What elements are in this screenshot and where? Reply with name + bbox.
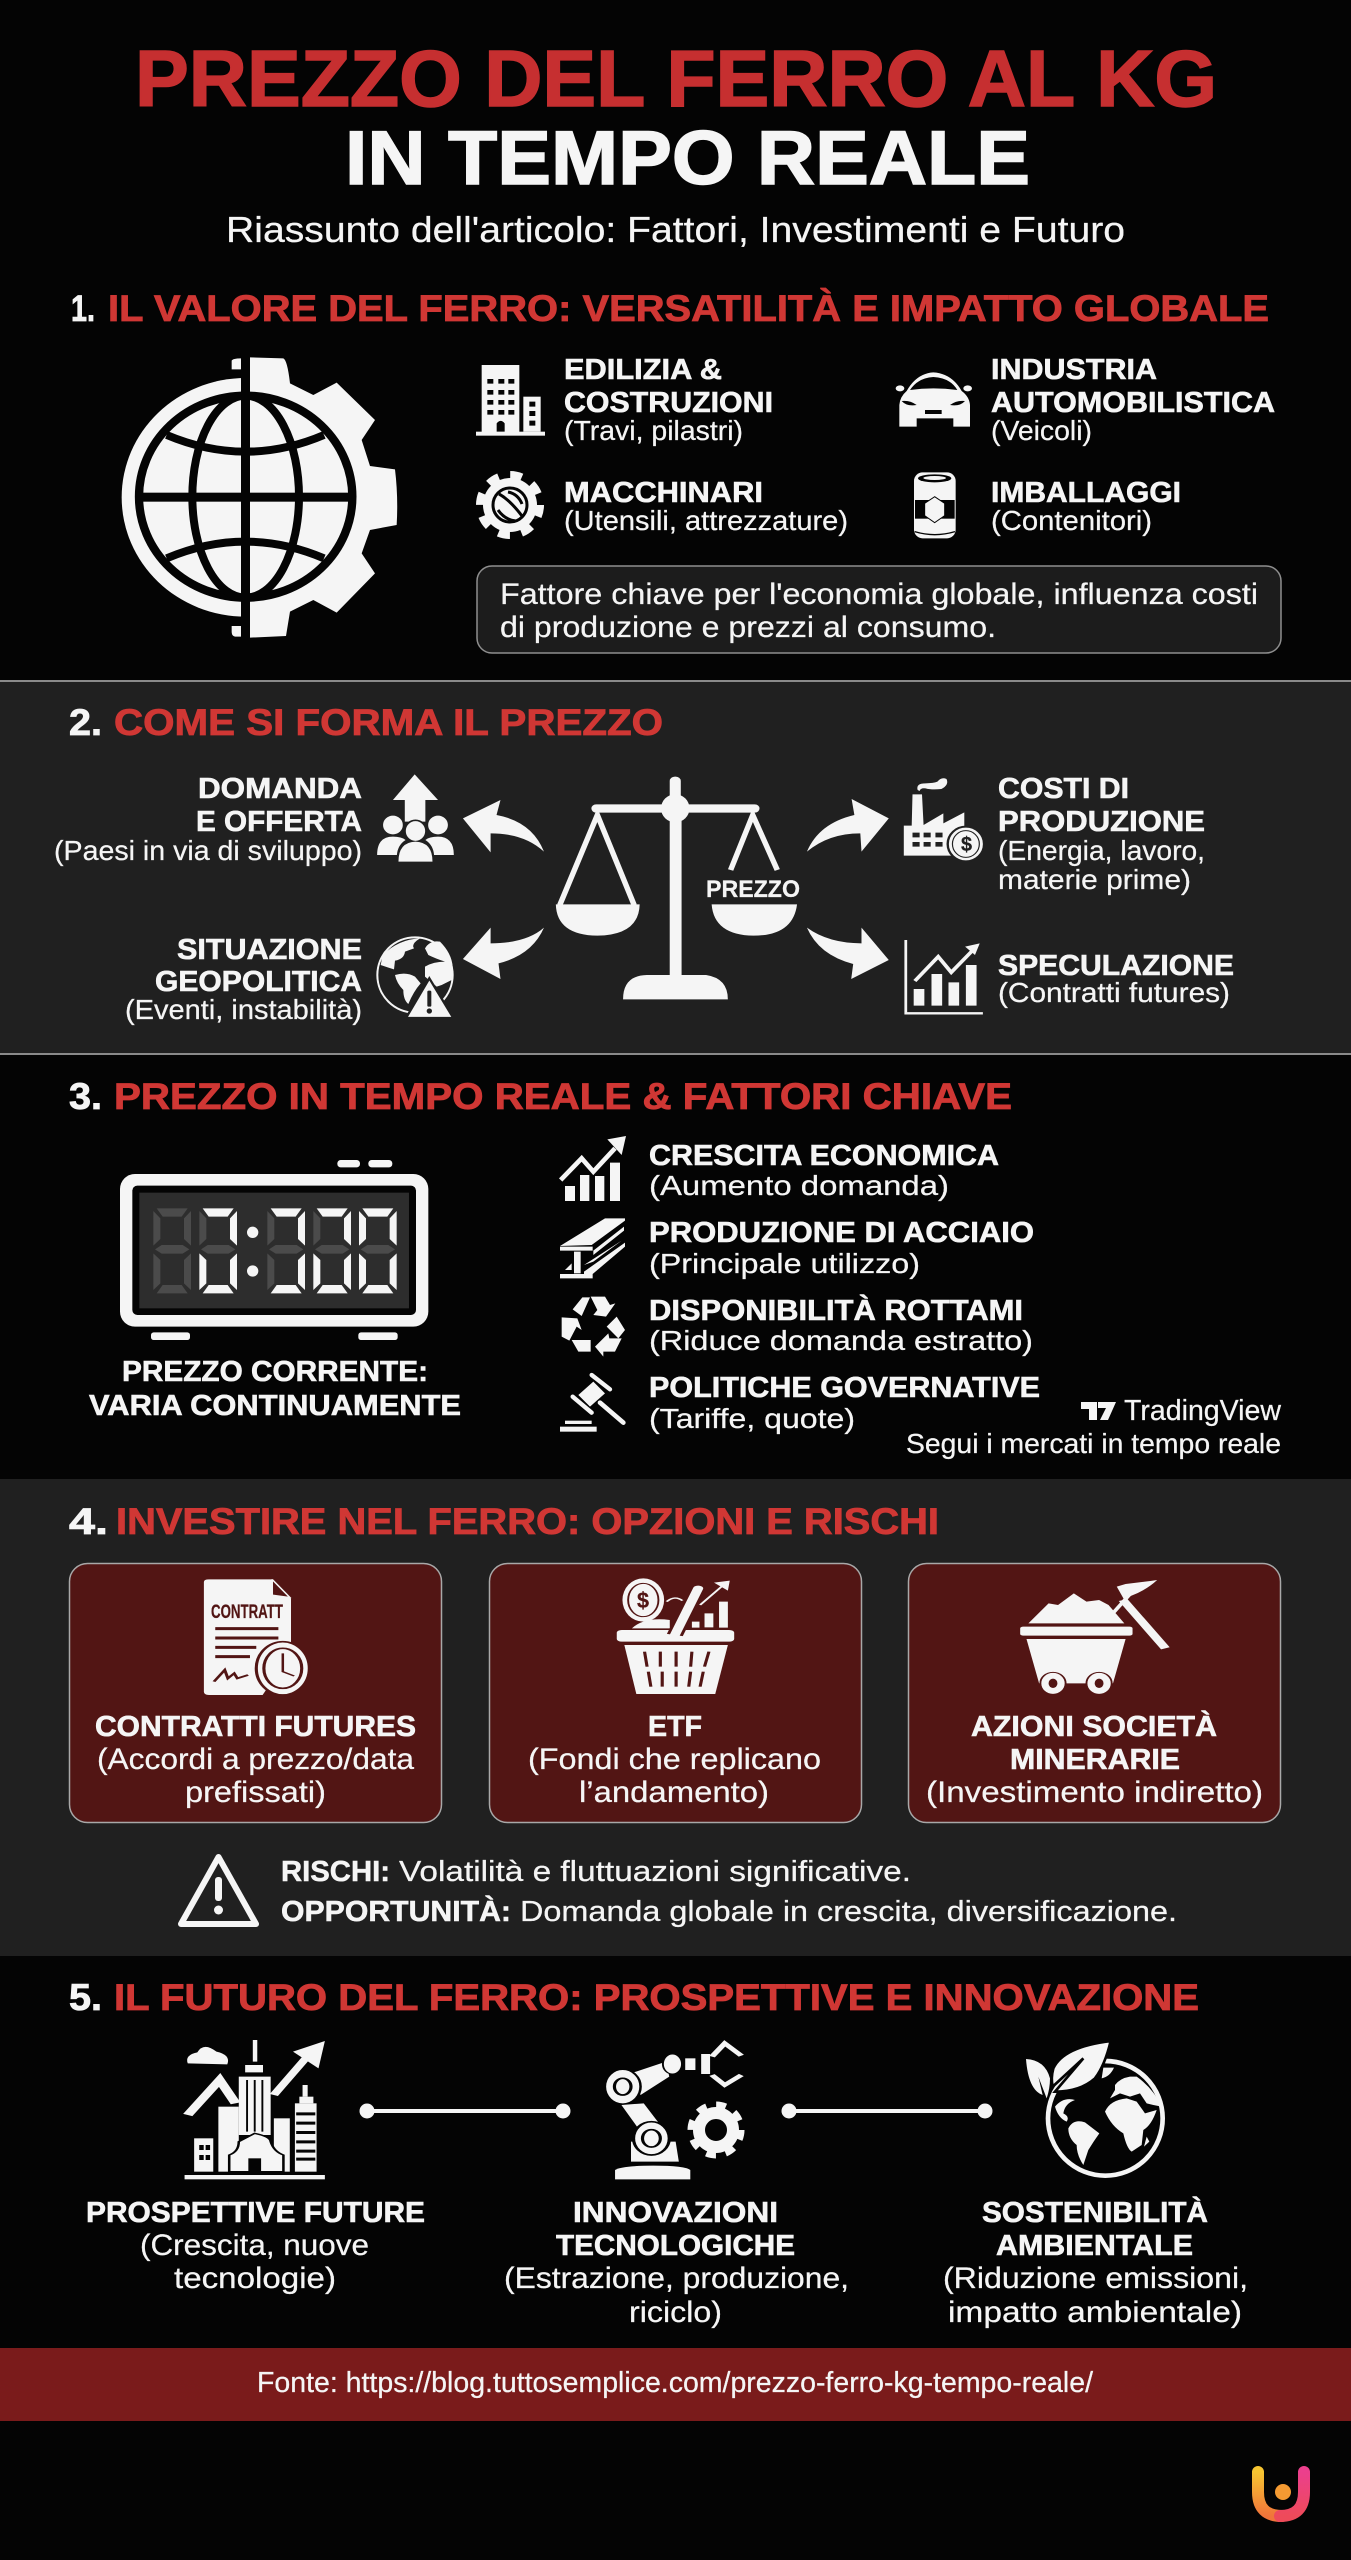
clock caption: VARIA CONTINUAMENTE [89,1390,461,1422]
heading 1: 1. [71,288,95,329]
factor: steel production [560,1217,1034,1279]
callout: key factor: Fattore chiave per l'economia globale, influenza costi [500,578,1258,611]
callout: key factor: di produzione e prezzi al consumo. [500,611,996,644]
icon: mine cart and pickaxe [1020,1580,1165,1694]
column: innovation: (Estrazione, produzione, [504,2262,849,2295]
icon: car [896,372,972,427]
card: etf [490,1564,862,1822]
item: automotive [896,354,1275,446]
item: automotive: AUTOMOBILISTICA [991,387,1275,419]
card: futures: CONTRATTI FUTURES [95,1711,416,1743]
column: future prospects: tecnologie) [174,2262,336,2295]
icon: globe and gear [122,340,414,660]
icon: gear [480,475,540,535]
item: edilizia [476,354,773,446]
item: speculation: (Contratti futures) [998,977,1230,1008]
icon: growth chart [561,1136,626,1201]
factor: economic growth: CRESCITA ECONOMICA [649,1140,999,1172]
item: demand and supply [54,773,454,866]
item: geopolitics: GEOPOLITICA [155,966,362,998]
clock caption [89,1356,461,1422]
scale label: PREZZO [706,876,800,903]
card: futures: prefissati) [185,1776,326,1809]
icon: factory and coin [904,778,984,861]
panel: section 1 value of iron [71,288,1281,660]
card: futures: (Accordi a prezzo/data [97,1743,415,1776]
arrow: to geopolitics [463,928,544,979]
title line 2: IN TEMPO REALE [345,116,1030,201]
arrow: to speculation [807,928,889,979]
icon: people and up arrow [377,774,454,862]
icon: steel beam [560,1218,625,1278]
panel: section 3 real time price [69,1076,1282,1459]
column: future prospects: (Crescita, nuove [140,2229,369,2262]
column: sustainability: (Riduzione emissioni, [943,2262,1248,2295]
icon: scale [556,777,797,999]
item: speculation [906,940,1234,1013]
item: production costs: PRODUZIONE [998,806,1205,838]
item: demand and supply: DOMANDA [198,773,362,805]
card: futures: CONTRATT [211,1602,283,1623]
icon: brand logo [1258,2472,1304,2516]
item: machinery [480,475,848,536]
item: production costs: $ [961,834,972,856]
item: edilizia: COSTRUZIONI [564,387,773,419]
icon: globe with warning [377,937,453,1018]
icon: city and growth arrow [185,2040,325,2179]
opportunities text: OPPORTUNITÀ: [281,1896,511,1928]
heading 5: IL FUTURO DEL FERRO: PROSPETTIVE E INNOVAZIONE [114,1977,1199,2018]
opportunities text [281,1896,1177,1928]
column: future prospects [86,2040,425,2295]
card: mining stocks: (Investimento indiretto) [926,1776,1263,1809]
card: mining stocks: AZIONI SOCIETÀ [971,1711,1217,1743]
factor: government policies: POLITICHE GOVERNATIVE [649,1372,1040,1404]
callout: key factor [477,566,1281,653]
icon: tradingview logo [1081,1402,1116,1420]
item: packaging: IMBALLAGGI [991,477,1181,509]
heading 4: INVESTIRE NEL FERRO: OPZIONI E RISCHI [116,1501,939,1542]
icon: earth with leaves [1026,2041,1163,2176]
item: machinery: MACCHINARI [564,477,763,509]
item: geopolitics: SITUAZIONE [177,934,362,966]
item: edilizia: (Travi, pilastri) [564,415,743,446]
title line 1: PREZZO DEL FERRO AL KG [135,34,1217,123]
icon: basket with coin and chart [617,1578,734,1694]
icon: gavel [560,1375,623,1432]
factor: scrap availability: (Riduce domanda estratto) [649,1325,1033,1356]
arrow: to costs [807,799,889,852]
column: sustainability: AMBIENTALE [996,2230,1193,2262]
card: etf: l’andamento) [579,1776,769,1809]
factor: government policies [560,1372,1040,1434]
footer source band: Fonte: https://blog.tuttosemplice.com/prezzo-ferro-kg-tempo-reale/ [257,2367,1093,2399]
icon: rising chart [906,940,983,1013]
factor: economic growth [561,1136,999,1201]
column: innovation [504,2043,849,2329]
footer source band [0,2348,1351,2421]
item: production costs [904,773,1205,895]
column: sustainability [943,2041,1248,2329]
factor: scrap availability [562,1295,1033,1357]
item: production costs: materie prime) [998,864,1191,895]
factor: steel production: (Principale utilizzo) [649,1248,920,1279]
heading 2: 2. [69,702,102,743]
column: innovation: INNOVAZIONI [573,2197,778,2229]
icon: can [914,472,956,538]
item: speculation: SPECULAZIONE [998,950,1234,982]
item: edilizia: EDILIZIA & [564,354,722,386]
item: production costs: COSTI DI [998,773,1129,805]
card: etf: $ [637,1588,649,1613]
item: demand and supply: (Paesi in via di sviluppo) [54,835,362,866]
header [135,34,1217,250]
heading 3: 3. [69,1076,102,1117]
item: automotive: INDUSTRIA [991,354,1157,386]
tradingview credit: Segui i mercati in tempo reale [906,1428,1281,1459]
panel: section 2 how price forms [0,680,1351,1055]
item: geopolitics: (Eventi, instabilità) [125,994,362,1025]
card: mining stocks [908,1564,1280,1822]
card: mining stocks: MINERARIE [1010,1744,1180,1776]
icon: recycle [562,1297,625,1357]
column: sustainability: impatto ambientale) [948,2296,1242,2329]
tradingview credit: TradingView [1124,1395,1282,1427]
card: etf: ETF [648,1711,702,1743]
column: sustainability: SOSTENIBILITÀ [982,2197,1208,2229]
factor: scrap availability: DISPONIBILITÀ ROTTAMI [649,1295,1023,1327]
panel: section 4 investing [0,1479,1351,1956]
arrow: to demand [463,800,544,852]
item: machinery: (Utensili, attrezzature) [564,505,848,536]
connector 1 [360,2104,570,2118]
factor: economic growth: (Aumento domanda) [649,1170,949,1201]
tradingview credit [906,1395,1282,1459]
heading 2: COME SI FORMA IL PREZZO [114,702,663,743]
risks text: RISCHI: [281,1856,390,1888]
item: automotive: (Veicoli) [991,415,1092,446]
icon: robot arm and gear [605,2043,741,2179]
heading 5: 5. [69,1977,102,2018]
item: packaging [914,472,1181,538]
risks text: Volatilità e fluttuazioni significative. [399,1856,911,1888]
icon: warning triangle [181,1857,256,1924]
item: demand and supply: E OFFERTA [196,806,362,838]
icon: buildings [476,365,545,436]
heading 1: IL VALORE DEL FERRO: VERSATILITÀ E IMPATTO GLOBALE [108,288,1269,329]
item: packaging: (Contenitori) [991,505,1152,536]
subtitle: Riassunto dell'articolo: Fattori, Investimenti e Futuro [226,209,1125,250]
column: innovation: TECNOLOGICHE [556,2230,795,2262]
connector 2 [782,2104,992,2118]
item: production costs: (Energia, lavoro, [998,835,1205,866]
factor: steel production: PRODUZIONE DI ACCIAIO [649,1217,1034,1249]
column: future prospects: PROSPETTIVE FUTURE [86,2197,425,2229]
card: futures [70,1564,442,1822]
heading 4: 4. [69,1501,108,1542]
icon: digital clock [120,1160,428,1340]
factor: government policies: (Tariffe, quote) [649,1403,855,1434]
item: geopolitics [125,934,453,1025]
icon: contract and clock [204,1579,309,1695]
column: innovation: riciclo) [629,2296,722,2329]
panel: section 5 future [69,1977,1248,2329]
card: etf: (Fondi che replicano [528,1743,821,1776]
clock caption: PREZZO CORRENTE: [122,1356,428,1388]
opportunities text: Domanda globale in crescita, diversificazione. [520,1896,1177,1928]
heading 3: PREZZO IN TEMPO REALE & FATTORI CHIAVE [114,1076,1012,1117]
